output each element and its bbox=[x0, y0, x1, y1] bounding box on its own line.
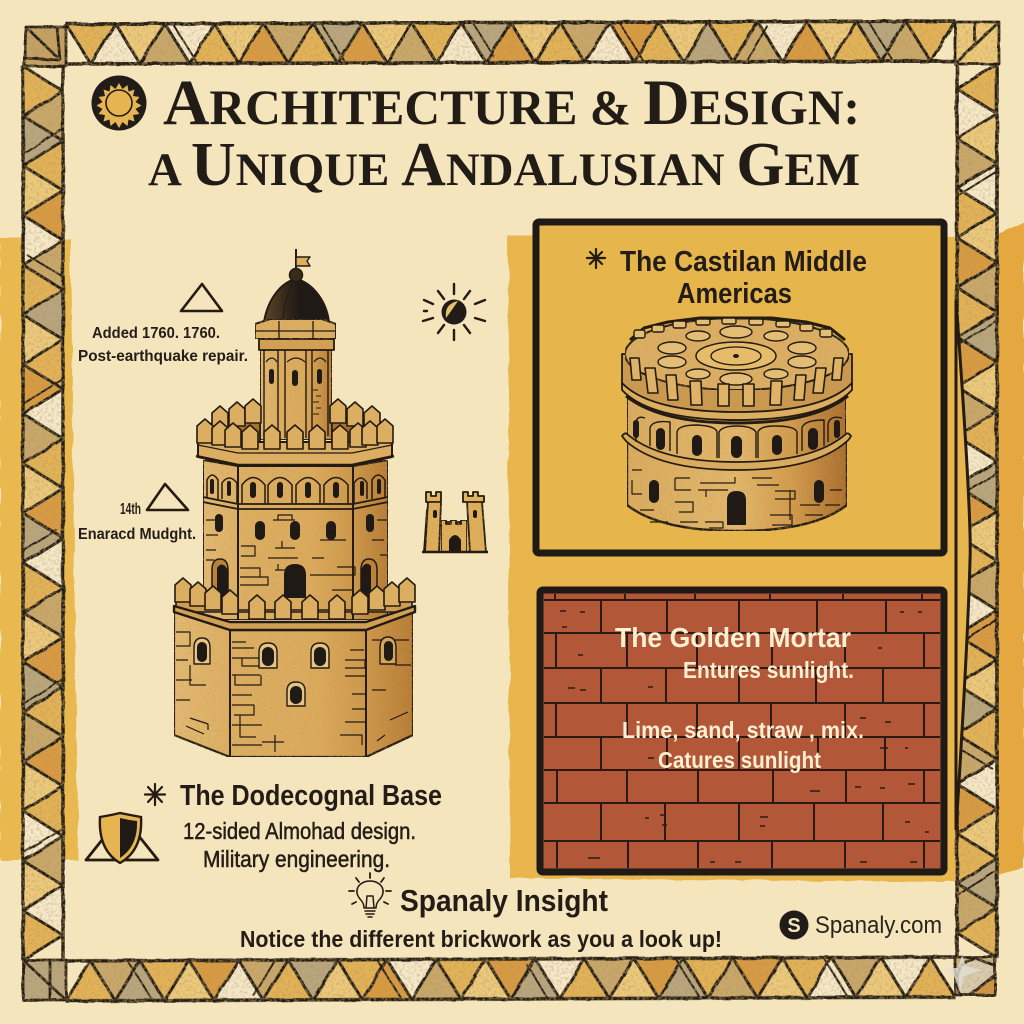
panel text: Catures sunlight bbox=[658, 747, 821, 773]
flag bbox=[296, 249, 310, 272]
brand logo: Spanaly.com bbox=[815, 912, 942, 939]
heading: Spanaly Insight bbox=[400, 883, 608, 918]
upper turret shaft bbox=[260, 348, 332, 440]
section: The Dodecognal Base bbox=[86, 780, 442, 872]
icon: shield with triangle bbox=[86, 813, 158, 863]
panel heading: Americas bbox=[677, 278, 792, 310]
panel heading bbox=[620, 246, 867, 310]
cylindrical tower illustration bbox=[622, 318, 852, 531]
section: Spanaly Insight bbox=[240, 873, 722, 952]
corner tile: bottom-right bbox=[955, 957, 995, 995]
brick wall pattern bbox=[544, 594, 940, 868]
panel text: The Golden Mortar bbox=[615, 622, 851, 653]
panel: The Castilan Middle Americas bbox=[536, 222, 944, 553]
icon: castle bbox=[422, 492, 488, 552]
annotation: top addition bbox=[78, 284, 248, 365]
icon: lightbulb bbox=[349, 873, 391, 917]
panel text bbox=[615, 622, 864, 773]
brand logo bbox=[780, 910, 942, 940]
section: The Dodecognal Base: Military engineering. bbox=[203, 846, 390, 872]
corner tile: bottom-left bbox=[23, 960, 66, 1000]
middle tier windows and door bbox=[212, 514, 377, 598]
description: 12-sided Almohad design. bbox=[183, 818, 416, 844]
turret cornice bbox=[255, 319, 336, 350]
annotation: 14th century bbox=[78, 484, 196, 543]
base battlements bbox=[174, 578, 415, 630]
ochre wash: right bbox=[985, 222, 1024, 878]
annotation: 14th century: 14th bbox=[120, 501, 141, 518]
icon: triangle bbox=[147, 484, 188, 510]
title bbox=[148, 67, 860, 199]
middle tier body bbox=[203, 460, 388, 620]
panel heading: The Castilan Middle bbox=[620, 246, 867, 278]
dome bbox=[264, 268, 329, 325]
annotation: 14th century: Enaracd Mudght. bbox=[78, 526, 196, 543]
tower illustration bbox=[174, 249, 415, 757]
ochre wash: centre bbox=[508, 236, 965, 882]
middle tier brickwork bbox=[206, 515, 387, 590]
annotation: top addition: Added 1760. 1760. bbox=[92, 325, 220, 342]
border narrowing on right edge bbox=[956, 300, 970, 830]
base tier brickwork bbox=[176, 632, 411, 752]
title line 1: ARCHITECTURE & DESIGN: bbox=[163, 67, 860, 139]
watermark sparkle bbox=[944, 955, 982, 992]
tip text: Notice the different brickwork as you a look up! bbox=[240, 926, 722, 952]
arcade windows bbox=[207, 475, 385, 503]
brand logo: S bbox=[787, 915, 801, 937]
title line 2: A UNIQUE ANDALUSIAN GEM bbox=[148, 131, 860, 199]
upper battlements bbox=[196, 419, 394, 466]
heading: The Dodecognal Base bbox=[180, 780, 442, 812]
icon: asterisk bbox=[587, 249, 605, 268]
icon: small sun bbox=[423, 284, 485, 340]
annotation: top addition: Post-earthquake repair. bbox=[78, 348, 248, 365]
base tier windows bbox=[194, 637, 396, 706]
panel text: Lime, sand, straw , mix. bbox=[622, 717, 864, 743]
icon: asterisk bbox=[145, 784, 165, 805]
panel: The Golden Mortar bbox=[540, 590, 944, 872]
icon: sun badge bbox=[92, 76, 146, 130]
rear battlements bbox=[204, 399, 386, 450]
base tier bbox=[174, 612, 413, 757]
corner tile: top-right bbox=[955, 22, 999, 64]
ochre wash: left bbox=[0, 238, 78, 860]
panel text: Entures sunlight. bbox=[683, 657, 854, 683]
icon: triangle bbox=[181, 284, 222, 311]
corner tile: top-left bbox=[24, 27, 66, 66]
